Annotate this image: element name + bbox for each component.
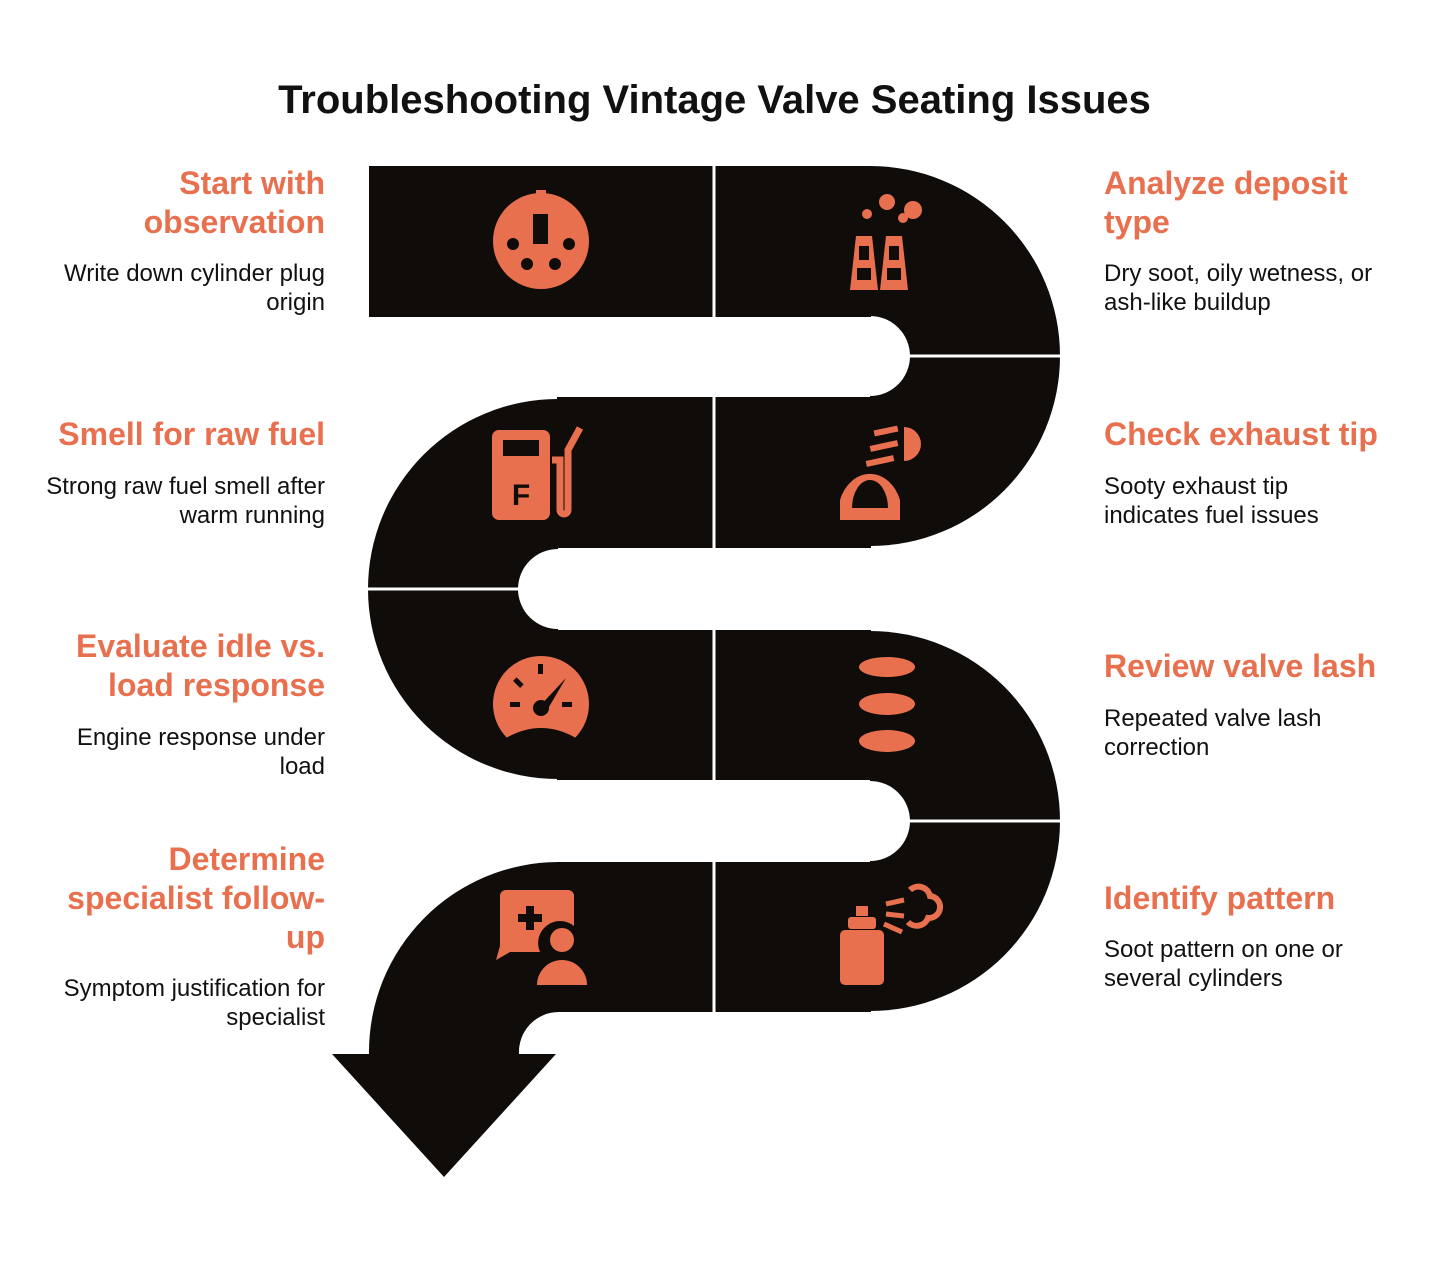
- text: specialist: [226, 1004, 325, 1031]
- icon: exhaust tip: [840, 426, 921, 520]
- text: Soot pattern on one or: [1104, 936, 1343, 963]
- icon: fuel pump: [492, 428, 580, 520]
- text: Determine: [168, 841, 325, 877]
- step 1 text: [64, 165, 325, 316]
- step 3 text: [46, 416, 325, 529]
- text: Strong raw fuel smell after: [46, 473, 325, 500]
- text: Symptom justification for: [64, 975, 325, 1002]
- step 7 text: [64, 841, 325, 1031]
- title: Troubleshooting Vintage Valve Seating Issues: [278, 78, 1151, 122]
- icon: spark plugs deposits: [850, 194, 922, 290]
- text: up: [286, 919, 325, 955]
- text: type: [1104, 204, 1170, 240]
- text: Write down cylinder plug: [64, 260, 325, 287]
- text: warm running: [180, 502, 325, 529]
- text: specialist follow-: [67, 880, 325, 916]
- text: several cylinders: [1104, 965, 1283, 992]
- text: origin: [266, 289, 325, 316]
- text: load: [280, 753, 325, 780]
- text: indicates fuel issues: [1104, 502, 1319, 529]
- icon: spine / valve lash: [859, 657, 915, 752]
- step 8 text: [1104, 880, 1343, 992]
- step 6 text: [1104, 648, 1376, 761]
- text: Start with: [179, 165, 325, 201]
- text: Check exhaust tip: [1104, 416, 1378, 452]
- text: Review valve lash: [1104, 648, 1376, 684]
- text: Analyze deposit: [1104, 165, 1348, 201]
- text: Engine response under: [77, 724, 325, 751]
- text: Identify pattern: [1104, 880, 1335, 916]
- text: observation: [144, 204, 325, 240]
- text: Smell for raw fuel: [58, 416, 325, 452]
- text: Evaluate idle vs.: [76, 628, 325, 664]
- icon: gauge: [493, 656, 589, 752]
- icon: fuel pump: F: [512, 479, 530, 512]
- text: correction: [1104, 734, 1209, 761]
- step 4 text: [1104, 416, 1378, 529]
- text: Repeated valve lash: [1104, 705, 1321, 732]
- text: ash-like buildup: [1104, 289, 1271, 316]
- icon: medical specialist: [496, 890, 587, 985]
- step 2 text: [1104, 165, 1372, 316]
- text: Sooty exhaust tip: [1104, 473, 1288, 500]
- text: load response: [108, 667, 325, 703]
- icon: plug: [493, 190, 589, 289]
- step 5 text: [76, 628, 325, 780]
- icon: spray bottle: [840, 887, 940, 985]
- text: Dry soot, oily wetness, or: [1104, 260, 1372, 287]
